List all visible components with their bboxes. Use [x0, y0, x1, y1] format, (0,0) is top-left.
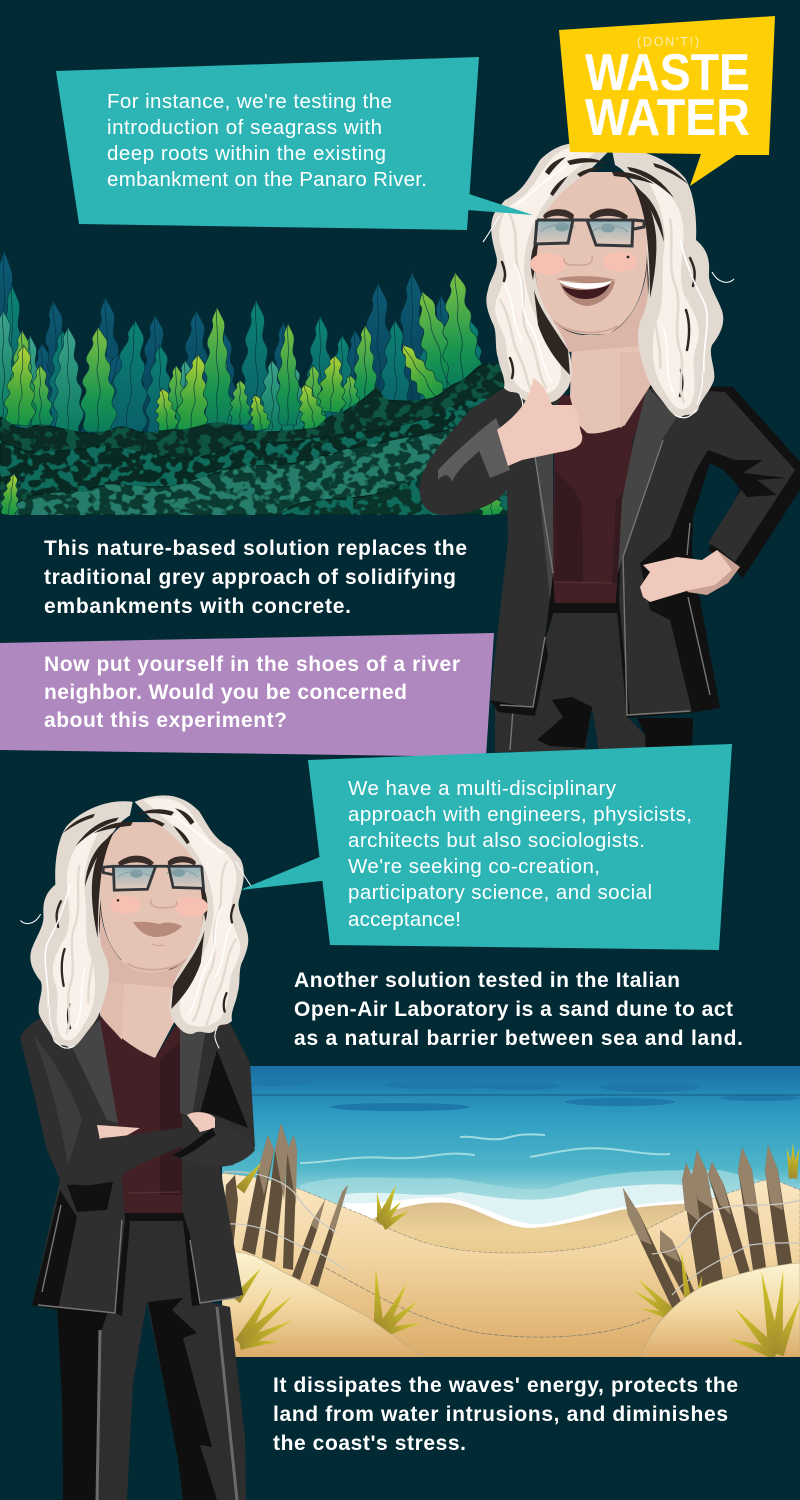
speech bubble: seagrass: [56, 57, 533, 230]
illustration: beach and dunes: [222, 1066, 800, 1360]
text: sand dune: [294, 969, 743, 1050]
neck shade: [100, 965, 125, 1040]
purple question band: [0, 633, 494, 757]
logo text: [585, 35, 750, 147]
text: sand dune: as a natural barrier between sea and land.: [294, 1027, 743, 1050]
front grass: [232, 1265, 800, 1360]
speech bubble: multi-disciplinary approach: [240, 744, 732, 950]
bubble text: acceptance!: [348, 908, 461, 931]
jacket: [420, 383, 800, 718]
far sand: [372, 1202, 685, 1253]
bubble text: [348, 777, 692, 931]
lower dune line: [320, 1265, 650, 1337]
text: sand dune: Another solution tested in the Italian: [294, 969, 680, 992]
maroon top: [98, 1015, 183, 1221]
maroon top: [552, 395, 645, 613]
trousers: [495, 608, 693, 752]
bubble text: We're seeking co-creation,: [348, 855, 600, 878]
purple question band: Now put yourself in the shoes of a river: [44, 653, 460, 676]
sea: [222, 1066, 800, 1204]
text: wave energy: land from water intrusions, and diminishes: [273, 1403, 728, 1426]
bubble text: introduction of seagrass with: [107, 116, 382, 139]
jacket: [20, 1015, 255, 1316]
text: wave energy: It dissipates the waves' energy, protects the: [273, 1374, 738, 1397]
neck shade: [620, 378, 651, 428]
bubble text: deep roots within the existing: [107, 142, 386, 165]
riverbank layers: [0, 362, 520, 515]
bubble text: approach with engineers, physicists,: [348, 803, 692, 826]
text: wave energy: [273, 1374, 738, 1455]
crossed arms: [63, 1112, 255, 1185]
head: [483, 143, 734, 418]
character: smiling scientist, thumbs up: [420, 143, 800, 752]
seagrass fronds: [0, 250, 487, 446]
grass tufts: [236, 1143, 800, 1338]
logo text: WATER: [585, 89, 750, 147]
text: sand dune: Open-Air Laboratory is a sand dune to act: [294, 998, 733, 1021]
text: nature-based solution: [44, 537, 467, 618]
logo text: (DON'T!): [637, 35, 699, 49]
bubble text: embankment on the Panaro River.: [107, 168, 427, 191]
hand on hip: [640, 550, 740, 602]
text: nature-based solution: embankments with concrete.: [44, 595, 351, 618]
mouth: smile: [556, 276, 616, 306]
hand: thumbs up: [478, 378, 582, 478]
logo: (don't!) waste water: [559, 16, 775, 186]
bubble text: [107, 90, 427, 191]
bubble text: architects but also sociologists.: [348, 829, 645, 852]
trousers: [57, 1220, 246, 1500]
fence wire: [224, 1172, 800, 1295]
water ripples: [252, 1084, 800, 1228]
front dunes: [222, 1250, 430, 1360]
purple question band: about this experiment?: [44, 709, 287, 732]
skin: neck: [100, 960, 178, 1058]
text: nature-based solution: traditional grey approach of solidifying: [44, 566, 456, 589]
text: wave energy: the coast's stress.: [273, 1432, 466, 1455]
character: scientist with crossed arms: [20, 795, 255, 1500]
mouth: [133, 922, 182, 946]
logo text: WASTE: [585, 44, 750, 102]
bubble text: We have a multi-disciplinary: [348, 777, 617, 800]
purple question band: neighbor. Would you be concerned: [44, 681, 407, 704]
posts right: [623, 1145, 792, 1312]
head: [20, 795, 251, 1048]
posts left: [222, 1123, 348, 1287]
illustration: seagrass and riverbank: [0, 250, 520, 517]
text: nature-based solution: This nature-based solution replaces the: [44, 537, 467, 560]
big dune: [222, 1173, 800, 1357]
bubble text: For instance, we're testing the: [107, 90, 392, 113]
bubble text: participatory science, and social: [348, 881, 652, 904]
skin: neck: [570, 335, 640, 434]
